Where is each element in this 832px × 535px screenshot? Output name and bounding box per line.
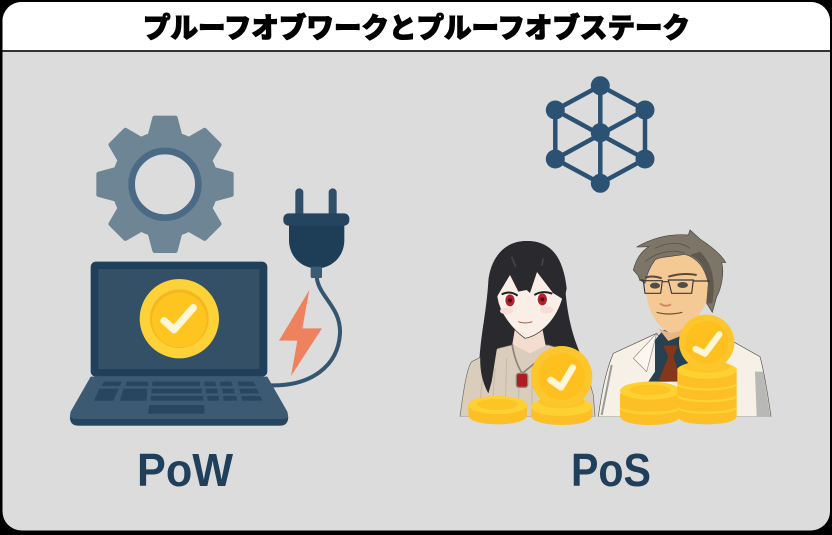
icon: plug <box>283 188 349 278</box>
title: プルーフオブワークとプルーフオブステーク <box>143 12 690 44</box>
coin stack: woman right with check <box>531 346 592 425</box>
icon: PoW gear, laptop and plug <box>70 118 349 426</box>
coin stack: man right with check <box>677 315 737 424</box>
laptop keyboard <box>94 382 263 414</box>
character: woman <box>460 241 595 417</box>
label: PoS: PoS <box>571 444 651 496</box>
illustration: PoS stakers with coins <box>460 230 771 425</box>
label: PoW: PoW <box>137 444 234 496</box>
icon: power cord <box>272 277 340 385</box>
coin stack: woman left <box>468 396 527 424</box>
icon: lightning bolt <box>279 290 322 376</box>
icon: laptop <box>70 262 288 426</box>
coin stack: man left <box>620 382 680 425</box>
icon: network nodes <box>546 76 654 193</box>
character: man <box>598 230 771 417</box>
coin with check mark <box>140 279 219 358</box>
icon: gear <box>99 118 231 251</box>
